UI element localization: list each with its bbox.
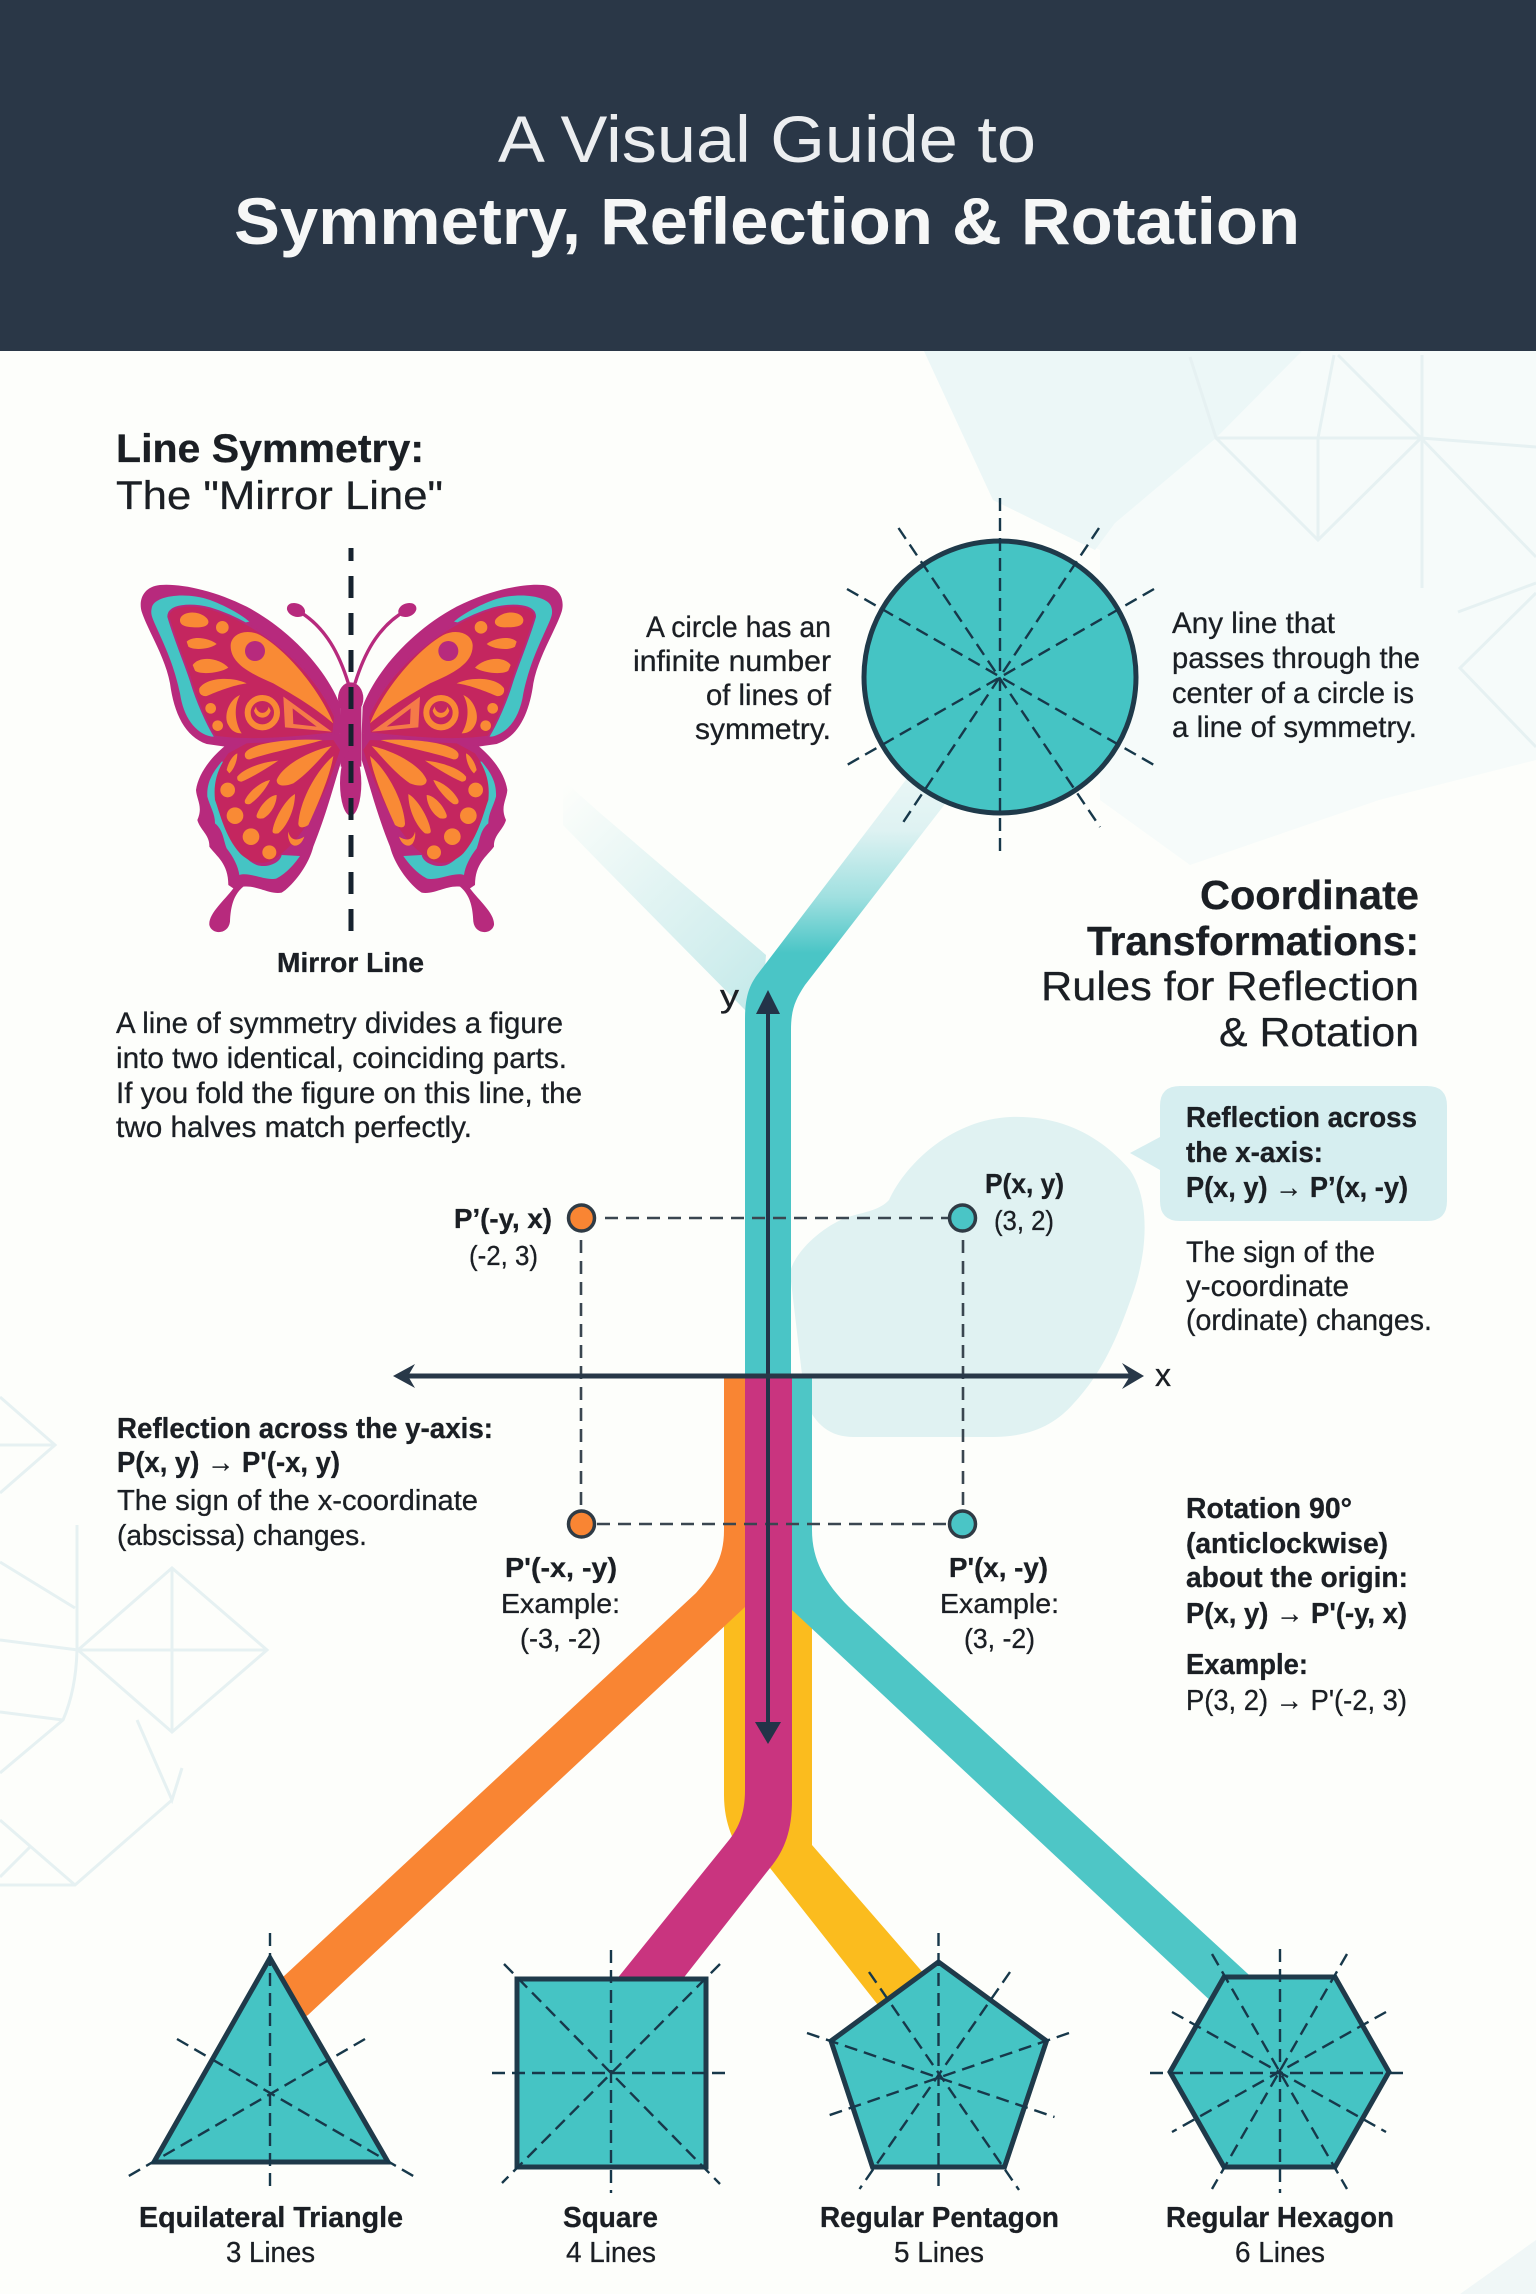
text: reflection across the y-axis: (abscissa) changes. — [117, 1520, 367, 1552]
point P'(x, -y): (3, -2) — [964, 1623, 1035, 1654]
text: circle left note — [633, 611, 832, 746]
point P'(-x, -y): Example: — [501, 1588, 620, 1619]
label: square: Square — [563, 2202, 658, 2234]
text: circle right note — [1172, 607, 1420, 744]
point P'(x, -y) — [940, 1511, 1059, 1654]
label: mirror line: Mirror Line — [277, 947, 424, 978]
point P(x, y): (3, 2) — [994, 1205, 1054, 1236]
icon: butterfly with mirror line — [141, 548, 563, 933]
icon: square — [492, 1950, 732, 2193]
text: circle right note: center of a circle is — [1172, 677, 1414, 710]
point P'(-y, x): (-2, 3) — [469, 1240, 538, 1271]
label: square — [563, 2202, 658, 2269]
text: circle left note: infinite number — [633, 645, 831, 678]
point P'(x, -y): P'(x, -y) — [949, 1552, 1048, 1583]
heading: line symmetry: Line Symmetry: — [116, 427, 424, 471]
point P'(-y, x): P’(-y, x) — [454, 1203, 552, 1234]
label: equilateral triangle — [139, 2202, 403, 2269]
icon: regular hexagon — [1150, 1949, 1410, 2193]
header band — [0, 0, 1536, 351]
label: regular pentagon: Regular Pentagon — [820, 2202, 1059, 2234]
callout: reflection across the x-axis: the x-axis: — [1186, 1137, 1323, 1169]
heading: coordinate transformations — [1041, 872, 1419, 1055]
icon: circle with lines of symmetry — [847, 498, 1154, 855]
text: circle right note: a line of symmetry. — [1172, 711, 1417, 744]
callout: reflection across the x-axis: P(x, y) → P’(x, -y) — [1186, 1172, 1408, 1204]
point P'(-y, x) — [454, 1203, 594, 1271]
point P'(-x, -y) — [501, 1511, 620, 1654]
heading: line symmetry — [116, 427, 443, 518]
text: reflection across the y-axis: P(x, y) → P'(-x, y) — [117, 1447, 340, 1479]
text: circle right note: Any line that — [1172, 607, 1336, 640]
label: regular pentagon — [820, 2202, 1059, 2269]
track: teal main trunk to circle — [745, 760, 979, 1376]
text: line of symmetry explanation: into two identical, coinciding parts. — [116, 1042, 567, 1075]
axis label y: y — [720, 978, 739, 1014]
text: y-coordinate note: y-coordinate — [1186, 1270, 1349, 1303]
label: regular hexagon: 6 Lines — [1235, 2237, 1325, 2269]
heading: coordinate transformations: Transformations: — [1087, 918, 1419, 964]
callout: reflection across the x-axis — [1130, 1086, 1447, 1221]
track: pale left branch into y-axis — [563, 780, 766, 1030]
text: circle left note: A circle has an — [646, 611, 831, 644]
text: circle left note: symmetry. — [695, 713, 831, 746]
track: teal to hexagon — [791, 1376, 1260, 2005]
point P(x, y) — [950, 1168, 1064, 1236]
heading: coordinate transformations: Coordinate — [1200, 872, 1419, 918]
point P'(-x, -y): (-3, -2) — [520, 1623, 601, 1654]
label: equilateral triangle: Equilateral Triangle — [139, 2202, 403, 2234]
text: y-coordinate note — [1186, 1236, 1432, 1337]
text: reflection across the y-axis: The sign of the x-coordinate — [117, 1485, 478, 1517]
track: magenta to square — [612, 1376, 792, 1985]
text: reflection across the y-axis — [117, 1413, 493, 1552]
x-axis arrow — [393, 1363, 1144, 1389]
text: circle left note: of lines of — [706, 679, 832, 712]
text: reflection across the y-axis: Reflection across the y-axis: — [117, 1413, 493, 1445]
text: circle right note: passes through the — [1172, 642, 1420, 675]
point P(x, y): P(x, y) — [985, 1168, 1064, 1199]
title: A Visual Guide to — [498, 102, 1036, 176]
label: regular pentagon: 5 Lines — [894, 2237, 984, 2269]
title — [234, 102, 1300, 258]
title: Symmetry, Reflection & Rotation — [234, 184, 1300, 258]
callout: reflection across the x-axis: Reflection across — [1186, 1102, 1417, 1134]
text: line of symmetry explanation: If you fold the figure on this line, the — [116, 1077, 582, 1110]
text: y-coordinate note: (ordinate) changes. — [1186, 1304, 1432, 1337]
text: rotation 90 degrees: P(3, 2) → P'(-2, 3) — [1186, 1685, 1407, 1717]
heading: line symmetry: The "Mirror Line" — [116, 474, 443, 518]
text: y-coordinate note: The sign of the — [1186, 1236, 1375, 1269]
label: square: 4 Lines — [566, 2237, 656, 2269]
icon: regular pentagon — [807, 1933, 1069, 2193]
heading: coordinate transformations: Rules for Reflection — [1041, 963, 1419, 1009]
text: line of symmetry explanation: two halves match perfectly. — [116, 1111, 472, 1144]
background geometric pattern: left — [0, 1397, 267, 1885]
text: rotation 90 degrees: (anticlockwise) — [1186, 1528, 1388, 1560]
point P'(x, -y): Example: — [940, 1588, 1059, 1619]
axis label x: x — [1155, 1357, 1171, 1393]
background geometric pattern: top right — [924, 351, 1536, 865]
track: yellow to pentagon — [724, 1580, 925, 2005]
text: rotation 90 degrees — [1186, 1493, 1408, 1717]
heading: coordinate transformations: & Rotation — [1219, 1009, 1419, 1055]
text: rotation 90 degrees: Example: — [1186, 1649, 1308, 1681]
track: orange to triangle — [283, 1376, 745, 2020]
text: rotation 90 degrees: Rotation 90° — [1186, 1493, 1352, 1525]
dashed guide lines between points — [581, 1218, 963, 1524]
label: regular hexagon — [1166, 2202, 1394, 2269]
background cloud shape behind coordinate plane — [790, 1117, 1145, 1437]
y-axis arrow — [755, 990, 781, 1744]
point P'(-x, -y): P'(-x, -y) — [505, 1552, 617, 1583]
text: rotation 90 degrees: P(x, y) → P'(-y, x) — [1186, 1598, 1407, 1630]
icon: equilateral triangle — [127, 1933, 415, 2192]
text: rotation 90 degrees: about the origin: — [1186, 1562, 1408, 1594]
background corner tint: bottom right — [1460, 2240, 1536, 2294]
text: line of symmetry explanation: A line of symmetry divides a figure — [116, 1007, 563, 1040]
label: equilateral triangle: 3 Lines — [226, 2237, 315, 2269]
text: line of symmetry explanation — [116, 1007, 582, 1144]
label: regular hexagon: Regular Hexagon — [1166, 2202, 1394, 2234]
